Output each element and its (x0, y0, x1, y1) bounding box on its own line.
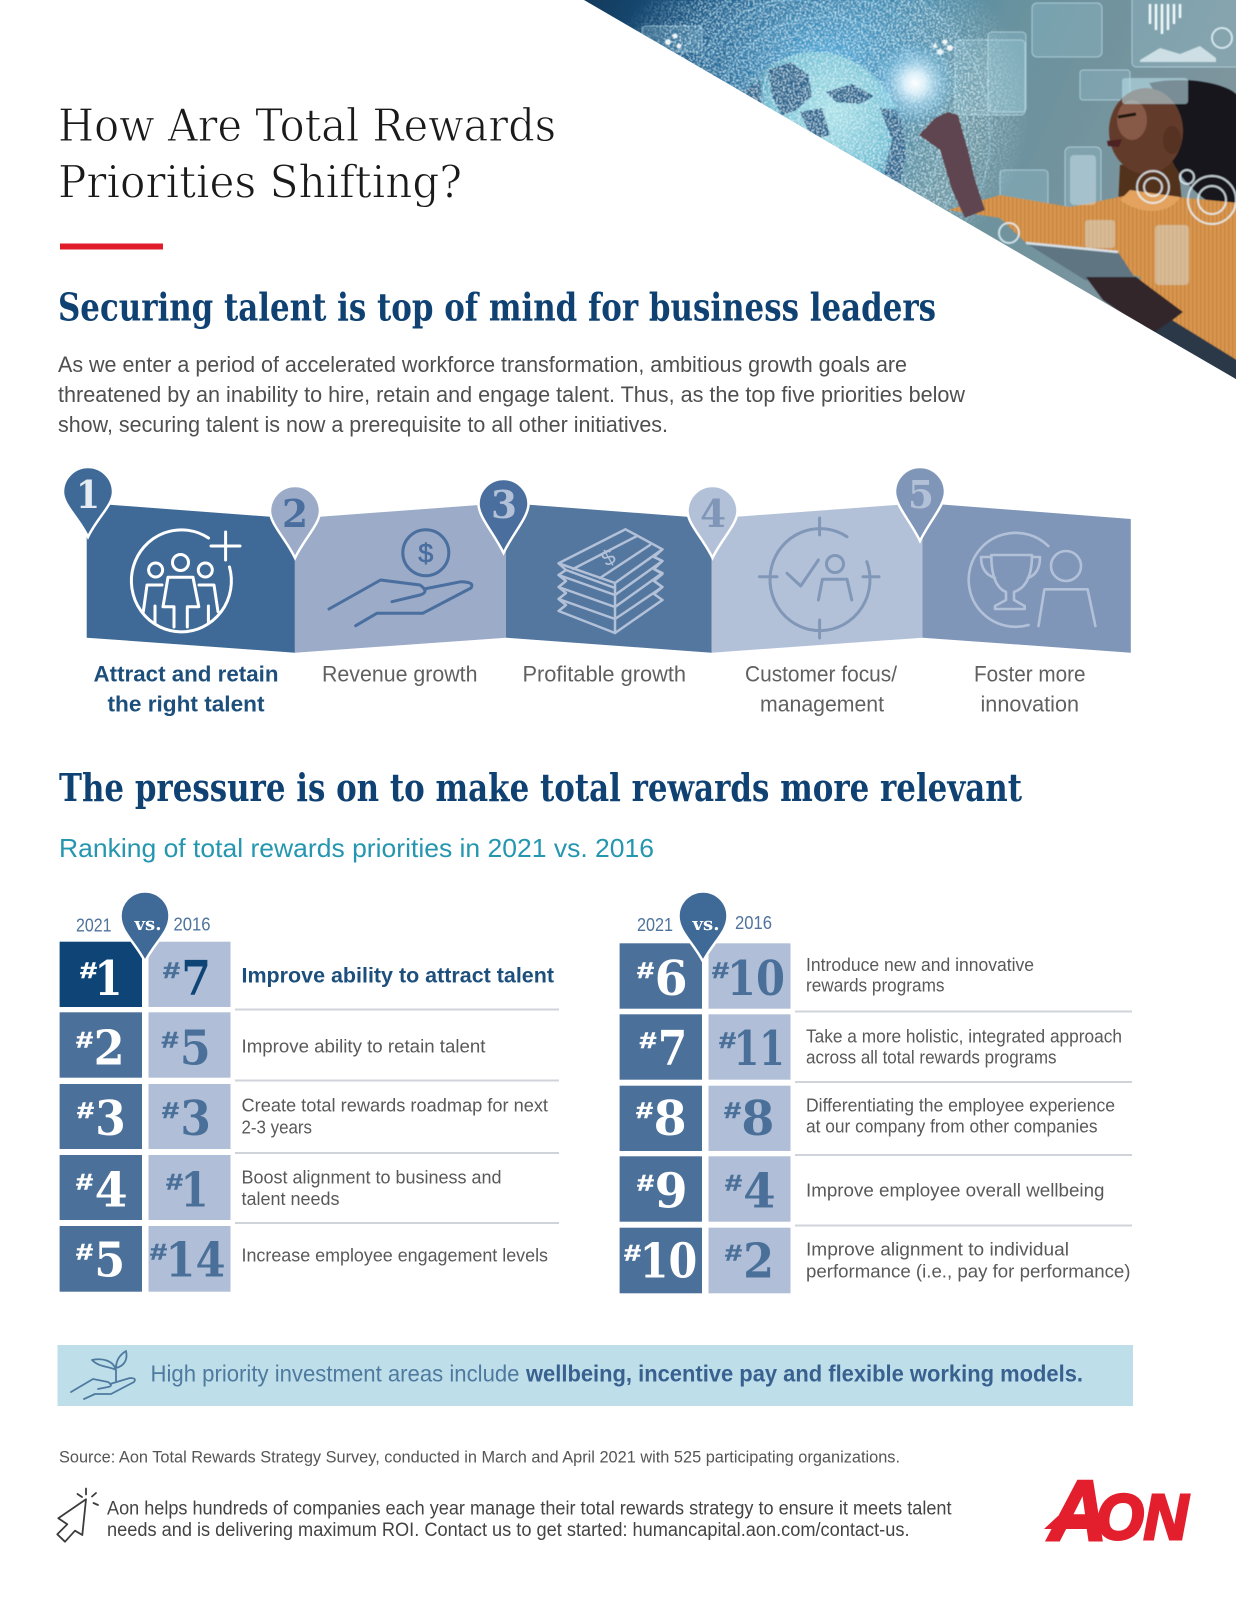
rank row 4: # (76, 1170, 93, 1195)
icon: cursor click (57, 1488, 98, 1542)
rank row 2 (60, 1012, 485, 1078)
icon: stack of cash (559, 529, 662, 633)
panel: revenue growth (295, 503, 506, 653)
photo: woman touching holographic globe (580, 0, 1236, 385)
rank row 4: 4 (95, 1163, 128, 1219)
rank row 8: # (724, 1098, 741, 1123)
rank row 1: # (80, 958, 97, 983)
title: Priorities Shifting? (58, 156, 462, 208)
pin: rank 4: 4 (700, 491, 726, 536)
rank row 6: 6 (655, 951, 688, 1007)
rank row 8: at our company from other companies (806, 1115, 1098, 1136)
ribbon labels: management (760, 692, 884, 717)
rank row 10: # (624, 1241, 641, 1266)
intro paragraph: As we enter a period of accelerated workforce transformation, ambitious growth goals are (58, 352, 907, 377)
rank row 10: 10 (640, 1234, 697, 1290)
year labels: 2016 (735, 913, 772, 933)
callout banner: High priority investment areas include (150, 1361, 520, 1387)
pin: rank 4 (688, 486, 738, 558)
year labels (76, 915, 210, 936)
rank row 4: # (166, 1170, 183, 1195)
rank row 2: 5 (180, 1020, 211, 1076)
ribbon labels: Attract and retain (94, 662, 278, 687)
logo: Aon: A (1047, 1464, 1107, 1559)
rank row 8 (620, 1086, 1115, 1151)
icon: trophy and person (969, 533, 1095, 627)
rank row 9: # (637, 1171, 654, 1196)
rank row 10: Improve alignment to individual (806, 1239, 1069, 1260)
call to action text: Aon helps hundreds of companies each year manage their total rewards strategy to ensure it meets talent (107, 1498, 952, 1519)
year labels: 2016 (174, 915, 210, 935)
rank row 9: Improve employee overall wellbeing (806, 1180, 1104, 1201)
rank row 7: Take a more holistic, integrated approach (806, 1026, 1122, 1047)
year labels: 2021 (76, 916, 112, 936)
source note: Source: Aon Total Rewards Strategy Survey, conducted in March and April 2021 with 525 participating organizations. (59, 1449, 900, 1467)
rank row 5: 14 (166, 1233, 226, 1289)
raised hand (919, 112, 985, 218)
rank row 6: rewards programs (806, 975, 944, 996)
rank row 2: 2 (94, 1020, 125, 1076)
rank row 3: # (162, 1098, 179, 1123)
pin: vs. (678, 891, 728, 962)
intro paragraph (58, 352, 965, 437)
rank row 5: # (150, 1240, 167, 1265)
rank row 8: 8 (654, 1091, 687, 1147)
rank row 6: # (637, 958, 654, 983)
left ranking table (60, 891, 559, 1292)
rank row 2: # (162, 1027, 178, 1052)
rank row 7 (620, 1014, 1122, 1080)
call to action text: needs and is delivering maximum ROI. Contact us to get started: humancapital.aon.com/contact-us. (107, 1520, 910, 1541)
callout banner: wellbeing, incentive pay and flexible working models. (525, 1361, 1083, 1387)
rank row 5: 5 (94, 1233, 125, 1289)
icon: hand with coin (329, 530, 472, 626)
call to action text (107, 1498, 952, 1541)
hand on tablet (1086, 277, 1183, 335)
title: How Are Total Rewards (58, 99, 556, 152)
pin: rank 1: 1 (76, 472, 100, 517)
ribbon labels: Profitable growth (522, 662, 686, 687)
year labels: 2021 (637, 915, 673, 935)
pin: rank 5 (895, 467, 945, 541)
title (58, 99, 556, 208)
rank row 3 (60, 1084, 548, 1149)
logo: Aon: ON (1096, 1481, 1190, 1553)
icon: hand holding seedling (71, 1351, 135, 1399)
rank row 9: 9 (655, 1164, 688, 1220)
rank row 9: 4 (743, 1164, 776, 1220)
rank row 3: # (77, 1098, 94, 1123)
rank row 2: # (76, 1027, 93, 1052)
pin: rank 3: 3 (491, 482, 517, 527)
rank row 2: Improve ability to retain talent (242, 1036, 486, 1057)
rank row 3: 2-3 years (242, 1116, 312, 1137)
rank row 4 (60, 1155, 501, 1220)
right ranking table (620, 891, 1132, 1293)
panel: revenue growth: $ (418, 538, 433, 568)
ribbon labels: Foster more (974, 662, 1086, 687)
callout banner (58, 1345, 1133, 1406)
panel: profitable growth (506, 503, 712, 653)
sweater (948, 194, 1236, 360)
rank row 4: Boost alignment to business and (242, 1166, 502, 1187)
rank row 6 (620, 943, 1034, 1009)
pin: vs.: vs. (691, 914, 720, 935)
rank row 1: 7 (181, 951, 211, 1007)
subheading: ranking: Ranking of total rewards priorities in 2021 vs. 2016 (59, 833, 654, 863)
ribbon labels: Revenue growth (322, 662, 478, 687)
pin: rank 1 (63, 467, 113, 537)
intro paragraph: threatened by an inability to hire, retain and engage talent. Thus, as the top five priorities below (58, 382, 965, 407)
rank row 1: 1 (94, 951, 122, 1007)
rank row 10: performance (i.e., pay for performance) (806, 1260, 1130, 1281)
rank row 8: # (636, 1098, 653, 1123)
rank row 7: across all total rewards programs (806, 1046, 1056, 1067)
rank row 10: 2 (743, 1234, 774, 1290)
rank row 3: Create total rewards roadmap for next (242, 1095, 548, 1116)
tablet (1030, 244, 1134, 280)
pin: vs. (120, 891, 170, 962)
year labels (637, 913, 772, 935)
ribbon labels: Customer focus/ (745, 662, 898, 687)
heading: securing talent: Securing talent is top of mind for business leaders (58, 284, 936, 330)
heading: pressure on total rewards: The pressure is on to make total rewards more relevant (59, 765, 1022, 810)
rank row 8: Differentiating the employee experience (806, 1095, 1115, 1116)
rank row 6: 10 (727, 951, 785, 1007)
rank row 7: # (719, 1028, 736, 1053)
rank row 1: # (163, 958, 180, 983)
pin: rank 3 (478, 479, 528, 553)
rank row 7: 11 (734, 1021, 785, 1077)
logo: Aon (1044, 1464, 1190, 1559)
rank row 3: 3 (95, 1091, 126, 1147)
pin: rank 2 (270, 486, 320, 558)
rank row 3: 3 (180, 1091, 211, 1147)
rank row 9: # (725, 1171, 742, 1196)
folded ribbon: top five priorities (63, 467, 1131, 653)
panel: attract and retain talent (87, 503, 295, 653)
rank row 4: talent needs (242, 1188, 340, 1209)
pin: rank 2: 2 (282, 491, 308, 536)
ribbon labels: innovation (980, 692, 1079, 717)
ribbon labels (94, 662, 1086, 717)
neck and head (1118, 160, 1182, 198)
panel: profitable growth: $ (597, 544, 620, 571)
rank row 5: # (76, 1240, 93, 1265)
rank row 10 (620, 1228, 1130, 1293)
rank row 6: # (712, 958, 729, 983)
rank row 8: 8 (741, 1091, 774, 1147)
rank row 4: 1 (181, 1163, 209, 1219)
rank row 5 (60, 1226, 548, 1292)
pin: vs.: vs. (133, 914, 162, 935)
rank row 1 (60, 942, 554, 1007)
intro paragraph: show, securing talent is now a prerequisite to all other initiatives. (58, 412, 668, 437)
rank row 7: # (640, 1028, 656, 1053)
rank row 1: Improve ability to attract talent (242, 965, 554, 988)
panel: foster innovation (922, 503, 1131, 653)
rank row 10: # (725, 1241, 742, 1266)
red accent bar (60, 244, 163, 250)
rank row 9 (620, 1156, 1104, 1222)
ribbon labels: the right talent (108, 692, 265, 717)
pin: rank 5: 5 (908, 472, 934, 517)
rank row 7: 7 (658, 1021, 687, 1077)
rank row 6: Introduce new and innovative (806, 954, 1034, 975)
rank row 5: Increase employee engagement levels (242, 1245, 548, 1266)
icon: people in circle with plus (131, 530, 240, 632)
panel: customer focus (712, 503, 922, 653)
icon: target with check and person (760, 518, 879, 638)
